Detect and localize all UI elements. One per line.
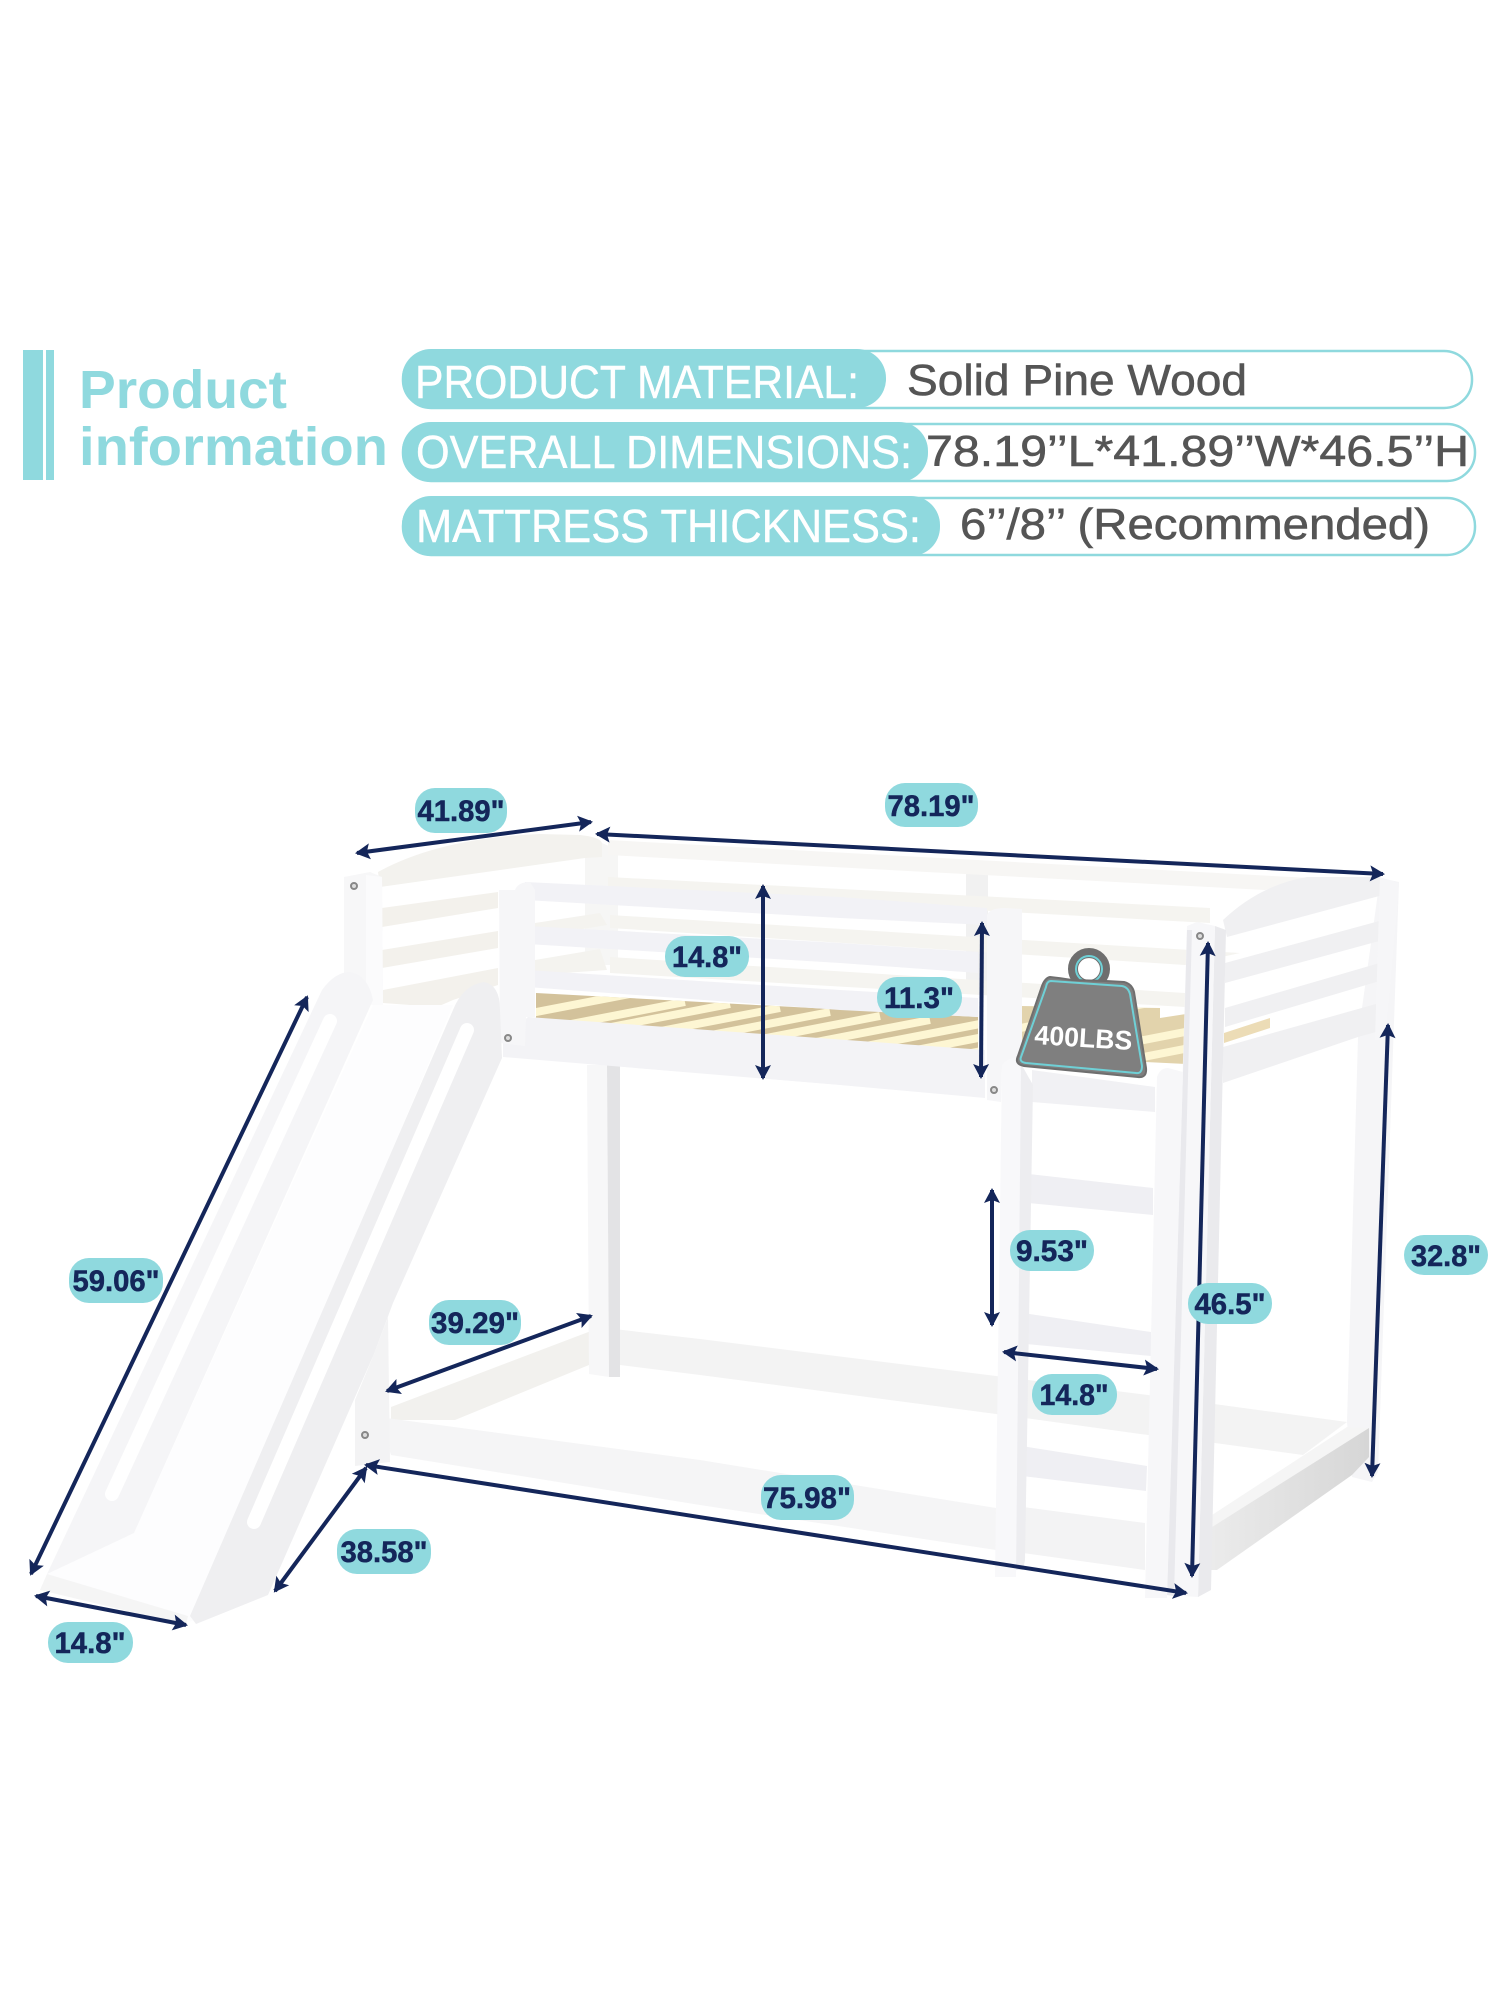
label 9.53: 9.53" [1016, 1235, 1088, 1268]
ladder [995, 1058, 1183, 1598]
bolts [351, 883, 1203, 1438]
far side rails and posts [391, 840, 1347, 1455]
arrow: ladder rung gap [990, 1190, 994, 1325]
heading: Product information: information [79, 417, 388, 477]
label 41.89: 41.89" [418, 795, 504, 828]
arrow: slide width [36, 1596, 186, 1625]
arrow: frame width [387, 1316, 591, 1391]
arrow: guard height 14.8 [761, 886, 765, 1078]
label 32.8: 32.8" [1411, 1240, 1481, 1273]
arrow: ladder width [1004, 1352, 1157, 1369]
label 11.3 [877, 977, 962, 1018]
dimension labels [48, 783, 1488, 1663]
row: overall dimensions: 78.19’’L*41.89’’W*46.5’’H [926, 427, 1469, 476]
label 59.06: 59.06" [72, 1265, 160, 1298]
label 59.06 [69, 1258, 163, 1303]
row: overall dimensions [402, 422, 1475, 482]
tall corner post [1167, 922, 1226, 1597]
label 14.8 slide [48, 1622, 133, 1663]
illustration: white loft bed with slide [40, 834, 1399, 1625]
label 78.19: 78.19" [888, 790, 974, 823]
label 14.8 guard [665, 936, 749, 977]
icon: 400 lbs weight [1017, 953, 1146, 1077]
arrow: clearance height 32.8 [1372, 1025, 1388, 1476]
row: product material [402, 349, 1472, 408]
row: mattress thickness: 6’’/8’’ (Recommended) [960, 500, 1430, 549]
row: overall dimensions: OVERALL DIMENSIONS: [416, 426, 912, 478]
arrow: slide run [275, 1468, 366, 1591]
arrow: total height 46.5 [1192, 943, 1208, 1576]
rear right post [1347, 878, 1399, 1482]
row: mattress thickness: MATTRESS THICKNESS: [416, 500, 921, 552]
lower frame near rail and left post [355, 1317, 1145, 1570]
mattress slats [536, 993, 1270, 1064]
label 75.98: 75.98" [763, 1482, 851, 1515]
row: product material: PRODUCT MATERIAL: [415, 356, 859, 408]
label 46.5 [1188, 1283, 1272, 1324]
label 14.8 slide: 14.8" [54, 1627, 126, 1660]
icon: 400 lbs weight: 400LBS [1034, 1020, 1133, 1056]
row: mattress thickness [402, 496, 1475, 556]
decorative heading bars [23, 350, 54, 480]
row: product material: Solid Pine Wood [907, 356, 1247, 405]
label 46.5: 46.5" [1194, 1288, 1266, 1321]
arrow: headboard width [357, 822, 591, 853]
guard rails and side rail [499, 882, 1022, 1102]
dimension arrows [31, 822, 1388, 1625]
label 38.58: 38.58" [340, 1536, 428, 1569]
arrow: bottom length [366, 1465, 1186, 1593]
arrow: overall length [597, 834, 1383, 874]
arrow: slide length [31, 997, 307, 1574]
label 14.8 ladder: 14.8" [1040, 1379, 1108, 1412]
label 14.8 guard: 14.8" [672, 941, 742, 974]
label 38.58 [337, 1529, 431, 1574]
arrow: guard height 11.3 [981, 923, 982, 1077]
heading: Product information [79, 360, 388, 477]
label 39.29: 39.29" [431, 1307, 519, 1340]
right end panel of the bed [1223, 877, 1399, 1083]
panel: product information [23, 349, 1475, 556]
label 9.53 [1010, 1230, 1094, 1271]
lower right end rail [1205, 1427, 1369, 1570]
label 14.8 ladder [1032, 1374, 1117, 1415]
left end panel of the bed [344, 834, 602, 1007]
label 11.3: 11.3" [884, 982, 954, 1015]
heading: Product information: Product [79, 360, 287, 420]
slide [40, 972, 502, 1625]
